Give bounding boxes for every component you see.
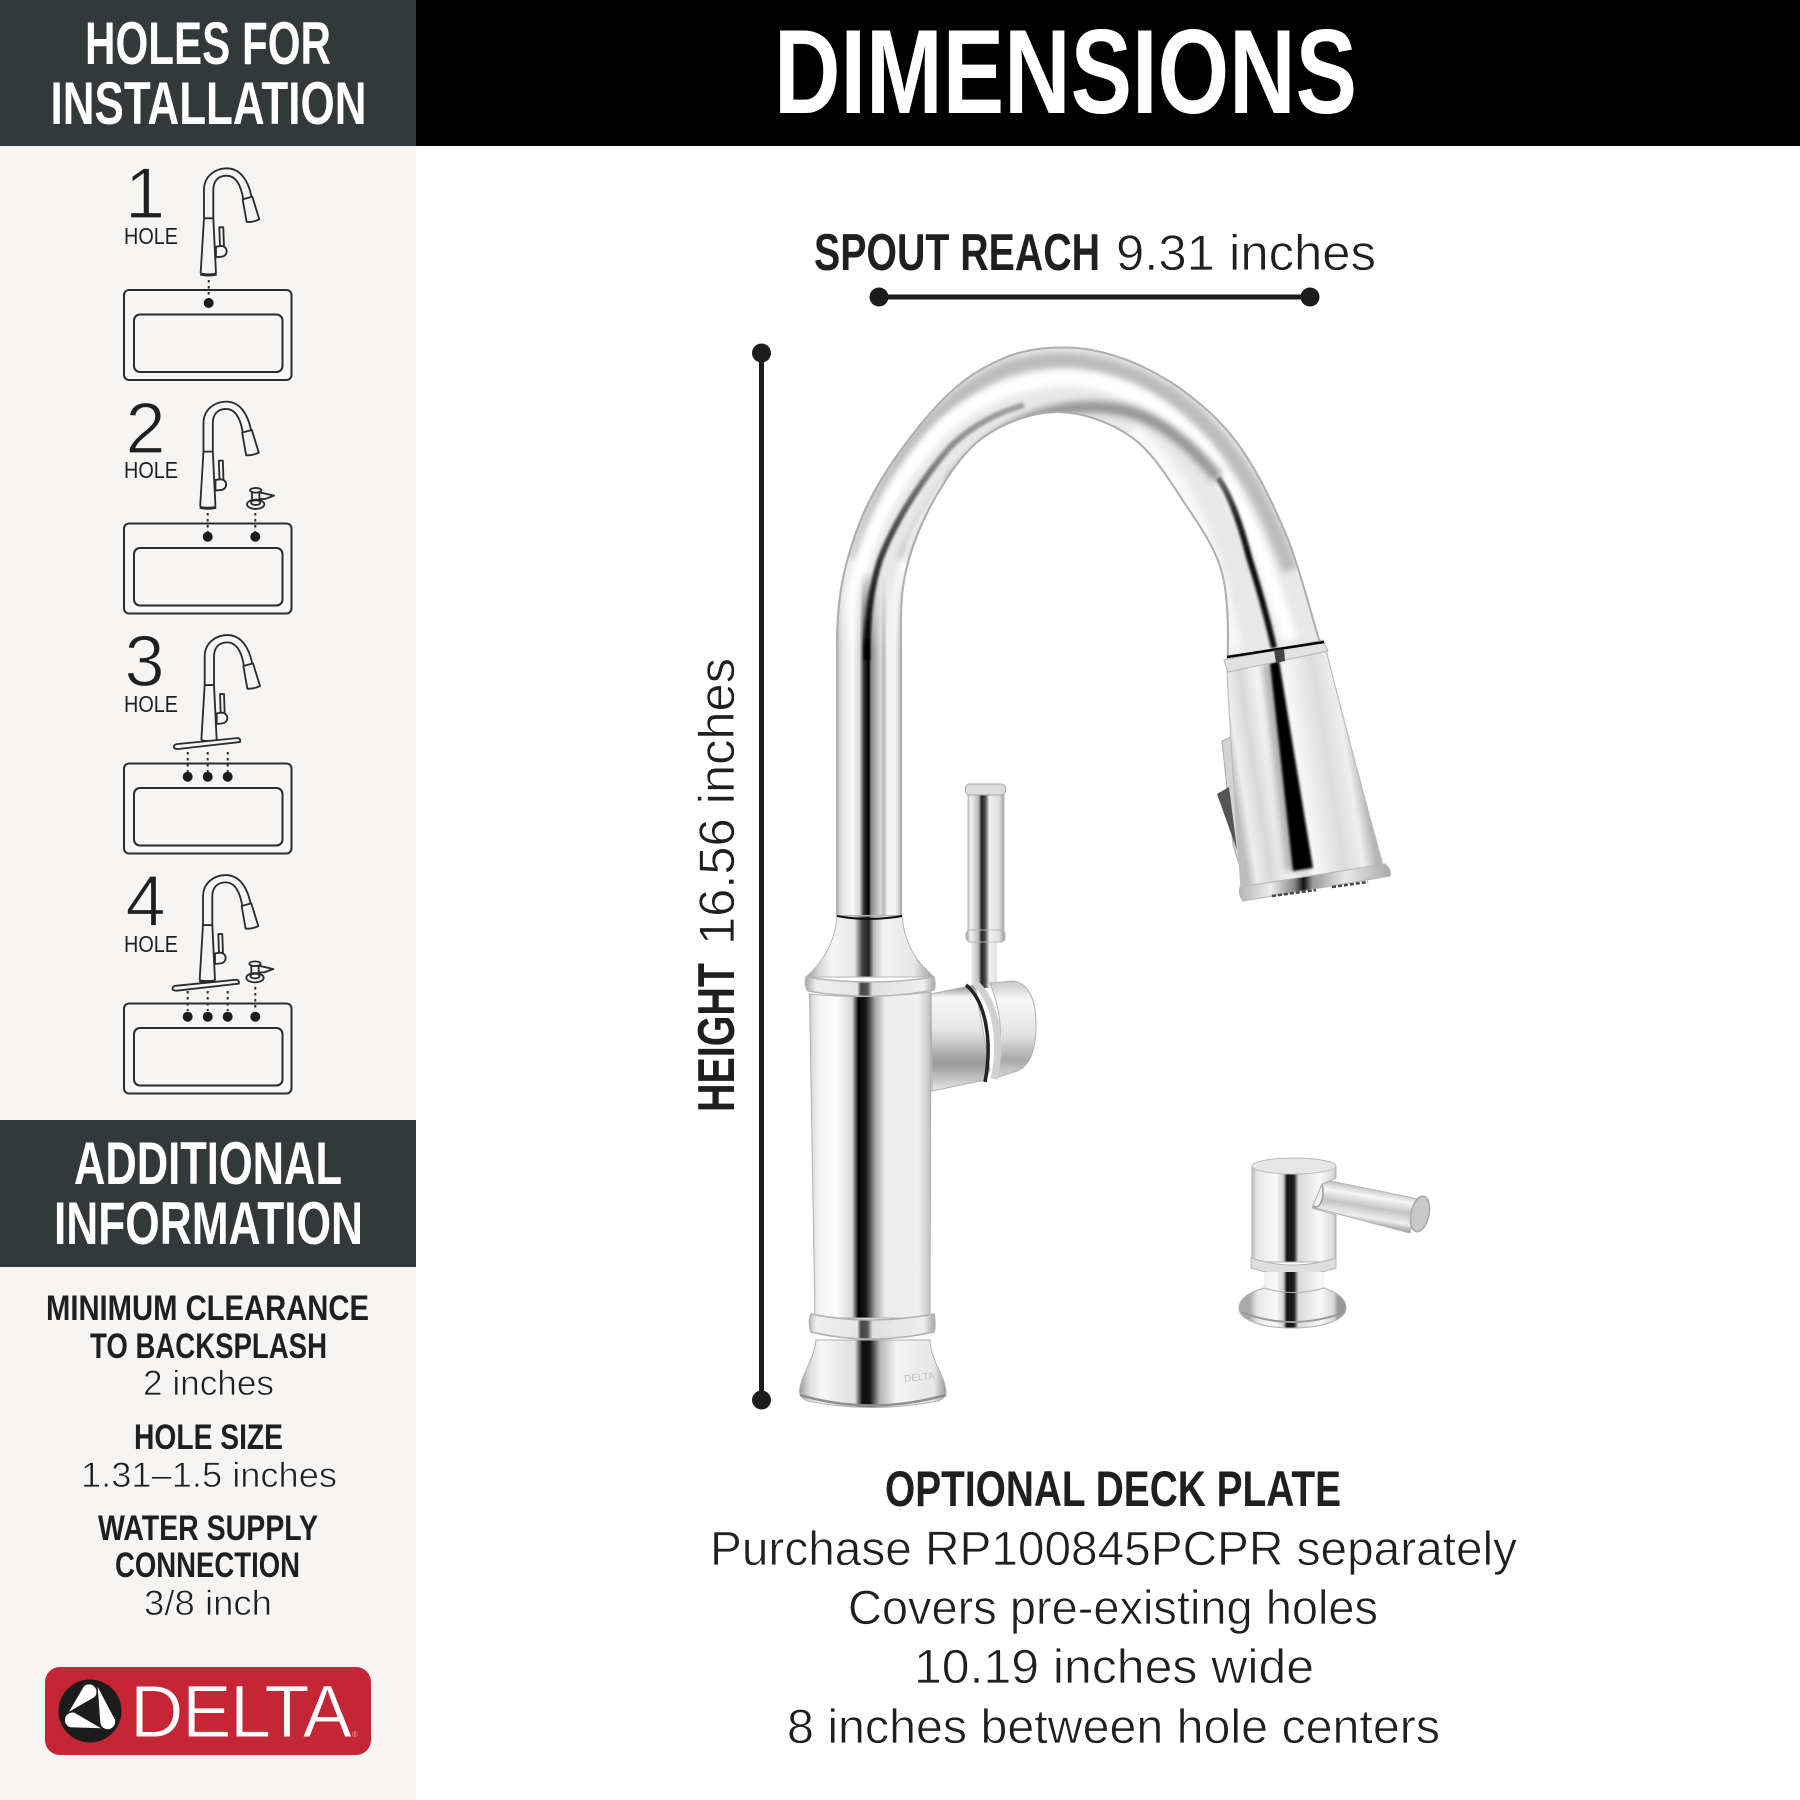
text block: minimum clearance: MINIMUM CLEARANCE (46, 1289, 369, 1328)
arrow: spout reach measure (870, 288, 1320, 306)
text block: optional deck plate: OPTIONAL DECK PLATE (885, 1461, 1341, 1517)
dimension label: spout reach: 9.31 inches (1116, 225, 1376, 281)
text block: hole size (81, 1418, 337, 1495)
icon: 3 hole sink: HOLE (124, 691, 178, 717)
icon: 3 hole sink (124, 622, 292, 854)
text block: minimum clearance: 2 inches (143, 1364, 274, 1403)
outer highlight (850, 378, 1290, 660)
text block: water supply connection: CONNECTION (115, 1546, 300, 1585)
dimension label: spout reach: SPOUT REACH (814, 224, 1100, 282)
tube edge shade (836, 346, 1326, 917)
streak right (1218, 478, 1274, 648)
sprayer trigger (1217, 737, 1241, 870)
text block: water supply connection: 3/8 inch (144, 1584, 272, 1623)
handle lever (966, 784, 1006, 988)
outer grey band (858, 361, 1290, 570)
icon: 2 hole sink (124, 389, 292, 614)
icon: 1 hole sink (124, 154, 292, 380)
riser (836, 572, 903, 915)
heading: additional information (0, 1120, 416, 1267)
arrow: height measure (752, 344, 771, 1410)
text block: optional deck plate: Purchase RP100845PCPR separately (710, 1523, 1517, 1576)
heading: holes for installation (0, 0, 416, 146)
right band highlight (1130, 432, 1234, 650)
icon: 4 hole sink (124, 862, 292, 1094)
handle hub (931, 981, 1036, 1091)
heading: additional information: INFORMATION (54, 1190, 363, 1257)
sprayer rim (1239, 864, 1390, 901)
faucet body (805, 977, 935, 1318)
streak left (867, 405, 1024, 660)
text block: optional deck plate: Covers pre-existing holes (848, 1582, 1378, 1635)
icon: 4 hole sink: HOLE (124, 931, 178, 957)
icon: 2 hole sink: 2 (125, 389, 166, 469)
text block: optional deck plate: 10.19 inches wide (914, 1641, 1314, 1694)
icon: 3 hole sink: 3 (124, 622, 165, 702)
dispenser body (1252, 1158, 1336, 1262)
logo: delta: ® (352, 1730, 358, 1739)
icon: 4 hole sink: 4 (125, 862, 166, 942)
text block: hole size: 1.31–1.5 inches (81, 1456, 337, 1495)
spout tube (836, 346, 1320, 917)
dispenser arm (1312, 1178, 1418, 1233)
base cone (806, 916, 934, 977)
dimension label: spout reach (814, 224, 1376, 282)
illustration: chrome faucet (800, 330, 1433, 1408)
panel: left sidebar (0, 0, 416, 1800)
icon: 1 hole sink: 1 (125, 154, 165, 234)
text block: water supply connection: WATER SUPPLY (98, 1509, 318, 1548)
logo: delta (45, 1667, 371, 1755)
logo: delta: DELTA (130, 1670, 353, 1753)
icon: 2 hole sink: HOLE (124, 457, 178, 483)
heading: holes for installation: HOLES FOR (85, 10, 331, 77)
dimension label: height: 16.56 inches (689, 658, 745, 945)
heading: additional information: ADDITIONAL (74, 1130, 342, 1197)
inner grey band (905, 407, 1218, 560)
text block: minimum clearance: TO BACKSPLASH (90, 1327, 327, 1366)
text block: hole size: HOLE SIZE (134, 1418, 283, 1457)
sprayer collar (1224, 640, 1328, 672)
icon: 1 hole sink: HOLE (124, 223, 178, 249)
text block: optional deck plate: 8 inches between hole centers (787, 1701, 1440, 1754)
title: dimensions (416, 0, 1800, 146)
base bell (800, 1314, 946, 1408)
title: dimensions: DIMENSIONS (774, 5, 1357, 139)
sprayer head (1227, 650, 1385, 888)
heading: holes for installation: INSTALLATION (50, 70, 366, 137)
text block: water supply connection (98, 1509, 318, 1623)
text block: optional deck plate (710, 1461, 1517, 1754)
text block: minimum clearance (46, 1289, 369, 1403)
dimension label: height: HEIGHT (688, 963, 746, 1112)
soap dispenser (1239, 1158, 1433, 1328)
inner highlight (894, 476, 946, 614)
base bell: DELTA (904, 1371, 936, 1385)
dimension label: height (688, 658, 746, 1112)
